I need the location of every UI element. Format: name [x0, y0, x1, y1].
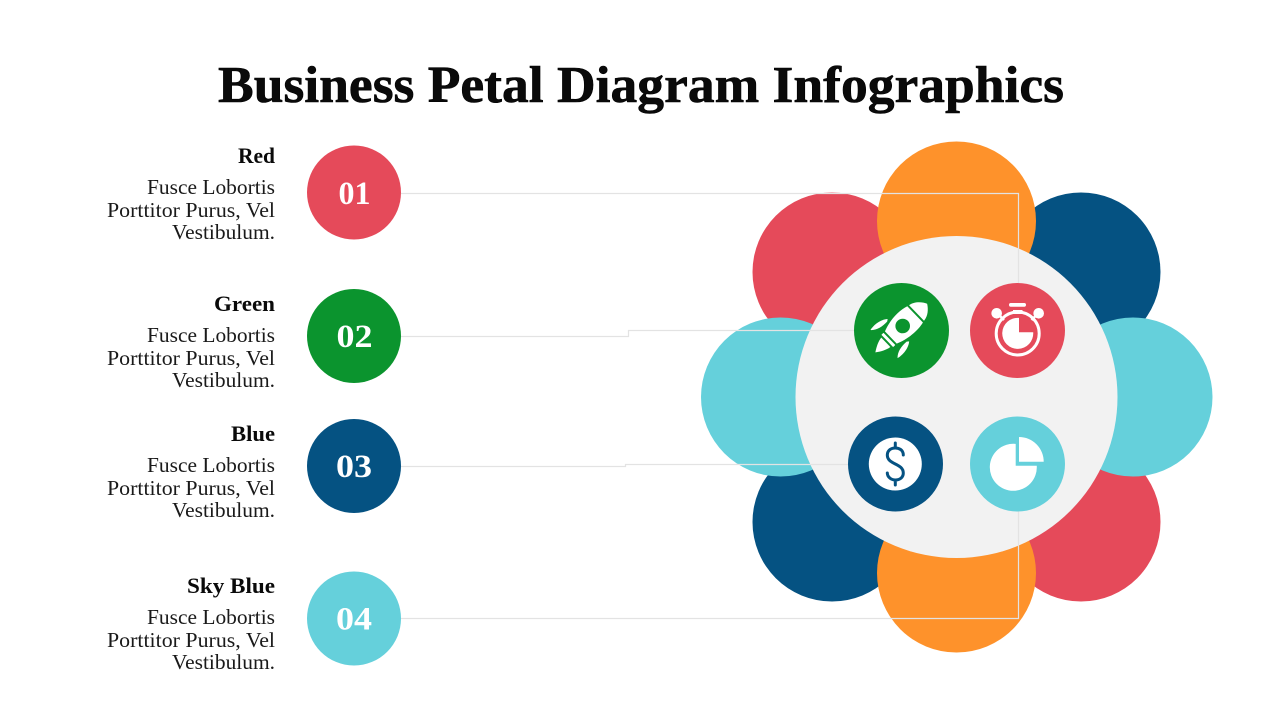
- description: sky blue: [107, 605, 275, 674]
- number badge 04: [307, 572, 401, 666]
- number badge 03: [307, 419, 401, 513]
- description: sky blue: Fusce Lobortis: [147, 605, 275, 629]
- connector lines: [401, 194, 1018, 618]
- icon: rocket: [854, 283, 949, 378]
- number badge 03: 03: [336, 449, 372, 485]
- description: green: Fusce Lobortis: [147, 323, 275, 347]
- number badge 01: [307, 146, 401, 240]
- description: green: Porttitor Purus, Vel: [107, 346, 275, 370]
- item 2: green: [107, 289, 401, 392]
- description: blue: Vestibulum.: [172, 498, 275, 522]
- description: blue: Fusce Lobortis: [147, 453, 275, 477]
- description: blue: Porttitor Purus, Vel: [107, 476, 275, 500]
- description: blue: [107, 453, 275, 522]
- description: green: [107, 323, 275, 392]
- item 3: blue: [107, 419, 401, 522]
- description: red: [107, 175, 275, 244]
- heading: green: Green: [214, 291, 275, 316]
- icon: dollar: [848, 416, 943, 512]
- heading: sky blue: Sky Blue: [187, 573, 275, 598]
- item 1: red: [107, 143, 401, 244]
- description: sky blue: Porttitor Purus, Vel: [107, 628, 275, 652]
- item 4: sky blue: [107, 572, 401, 674]
- number badge 04: 04: [336, 602, 372, 638]
- icon: stopwatch: [970, 283, 1065, 378]
- description: green: Vestibulum.: [172, 368, 275, 392]
- number badge 01: 01: [338, 176, 370, 212]
- heading: red: Red: [238, 143, 275, 168]
- description: red: Fusce Lobortis: [147, 175, 275, 199]
- heading: blue: Blue: [231, 421, 275, 446]
- title: Business Petal Diagram Infographics: [218, 57, 1064, 114]
- petal flower diagram: [701, 142, 1212, 652]
- description: red: Vestibulum.: [172, 220, 275, 244]
- description: sky blue: Vestibulum.: [172, 650, 275, 674]
- number badge 02: 02: [336, 319, 372, 355]
- number badge 02: [307, 289, 401, 383]
- icon: pie chart: [970, 416, 1065, 512]
- description: red: Porttitor Purus, Vel: [107, 198, 275, 222]
